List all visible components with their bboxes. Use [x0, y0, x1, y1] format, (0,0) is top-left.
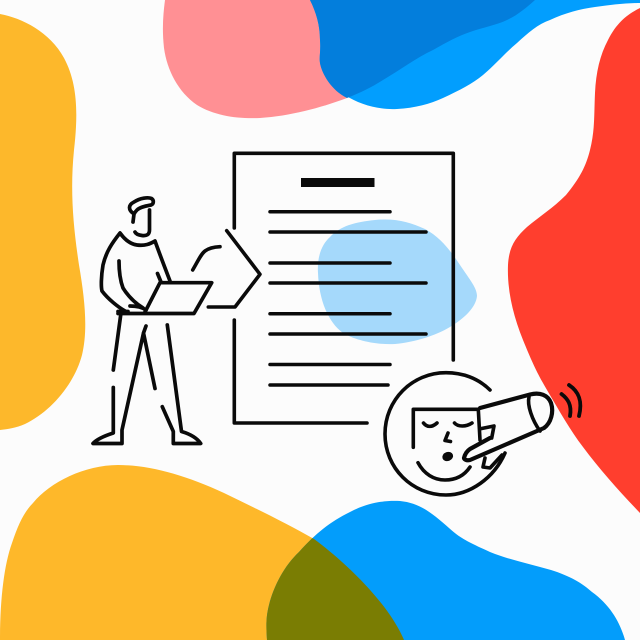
arrow pointing to document: [193, 231, 260, 307]
fingernail: [529, 397, 540, 431]
blob: pink top: [163, 0, 360, 118]
blob: pale blue on document: [318, 219, 477, 344]
blob: yellow left: [0, 14, 85, 430]
right eye: [454, 423, 472, 426]
document outline: [234, 153, 453, 423]
blob: blue top dark overlap: [310, 0, 535, 98]
nose: [445, 433, 450, 442]
legs: [93, 315, 201, 444]
mouth: [441, 450, 454, 463]
finger: [464, 394, 552, 460]
person with laptop: [93, 198, 212, 444]
blob: blue bottom: [266, 501, 625, 640]
torso and arm: [101, 233, 170, 311]
document text lines: [270, 212, 426, 385]
left eye: [424, 423, 437, 426]
circle outline: [385, 373, 505, 495]
face: [135, 210, 150, 236]
thumb: [482, 426, 494, 438]
face circle icon: [385, 373, 552, 495]
blob: red right: [508, 8, 640, 513]
document title bar: [301, 178, 374, 187]
lower finger: [483, 455, 502, 468]
forearm: [158, 274, 161, 282]
chin: [418, 463, 470, 480]
sound waves: [562, 385, 580, 416]
blob: yellow bottom: [0, 465, 404, 640]
head: [413, 409, 480, 447]
blob: blue top: [310, 0, 640, 109]
laptop: [118, 283, 212, 314]
inner arm: [119, 261, 146, 310]
blob: olive overlap: [266, 538, 404, 640]
hair: [130, 198, 153, 222]
